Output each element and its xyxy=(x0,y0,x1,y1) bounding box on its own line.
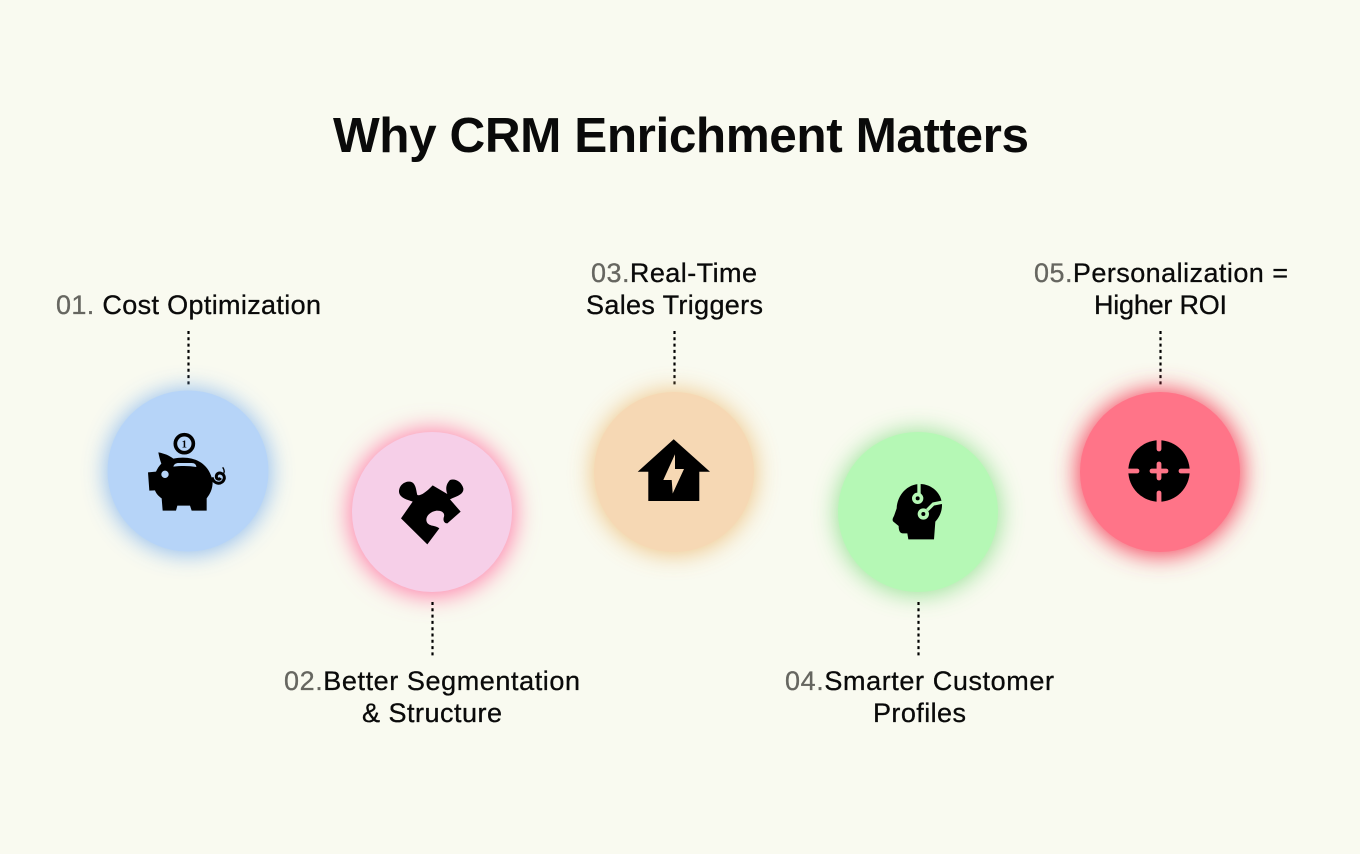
connector 4 xyxy=(917,602,920,656)
glow 1 xyxy=(106,390,270,554)
icon: target crosshair xyxy=(1124,436,1194,506)
step 1: cost optimization xyxy=(56,290,321,554)
label: 05 Personalization = Higher ROI: 05.Personalization = xyxy=(1034,258,1288,288)
icon: piggy bank xyxy=(148,435,224,511)
icon: piggy bank: 1 xyxy=(182,440,187,451)
label: 02 Better Segmentation xyxy=(284,666,580,728)
title: Why CRM Enrichment Matters xyxy=(333,108,1029,163)
label: 04 Smarter Customer Profiles: 04.Smarter Customer xyxy=(785,666,1054,696)
glow 2 xyxy=(349,430,515,596)
label: 05 Personalization = Higher ROI: Higher ROI xyxy=(1094,290,1227,320)
glow 3 xyxy=(592,391,756,555)
label: 03 Real-Time Sales Triggers: 03.Real-Time xyxy=(591,258,757,288)
step 4: smarter customer profiles xyxy=(785,431,1054,728)
connector 1 xyxy=(187,331,190,385)
label: 02 Better Segmentation: 02.Better Segmentation xyxy=(284,666,580,696)
connector 2 xyxy=(431,602,434,656)
label: 04 Smarter Customer Profiles xyxy=(785,666,1054,728)
step 5: personalization xyxy=(1034,258,1288,556)
label: 03 Real-Time Sales Triggers xyxy=(586,258,763,320)
icon: puzzle piece xyxy=(399,479,463,544)
step 2: better segmentation xyxy=(284,430,580,728)
circle 2 xyxy=(352,432,512,592)
glow 5 xyxy=(1077,390,1243,556)
connector 5 xyxy=(1159,331,1162,385)
label: 05 Personalization = Higher ROI xyxy=(1034,258,1288,320)
circle 4 xyxy=(838,432,998,592)
circle 3 xyxy=(594,392,754,552)
circle 5 xyxy=(1080,392,1240,552)
glow 4 xyxy=(836,431,1000,595)
circle 1 xyxy=(108,390,268,552)
connector 3 xyxy=(673,331,676,385)
label: 04 Smarter Customer Profiles: Profiles xyxy=(873,698,966,728)
icon: house with lightning bolt xyxy=(638,439,710,501)
label: 03 Real-Time Sales Triggers: Sales Triggers xyxy=(586,290,763,320)
label: 01 Cost Optimization: 01. Cost Optimization xyxy=(56,290,321,320)
icon: head with circuit xyxy=(893,483,943,539)
step 3: real-time sales triggers xyxy=(586,258,763,555)
label: 02 Better Segmentation: & Structure xyxy=(362,698,502,728)
